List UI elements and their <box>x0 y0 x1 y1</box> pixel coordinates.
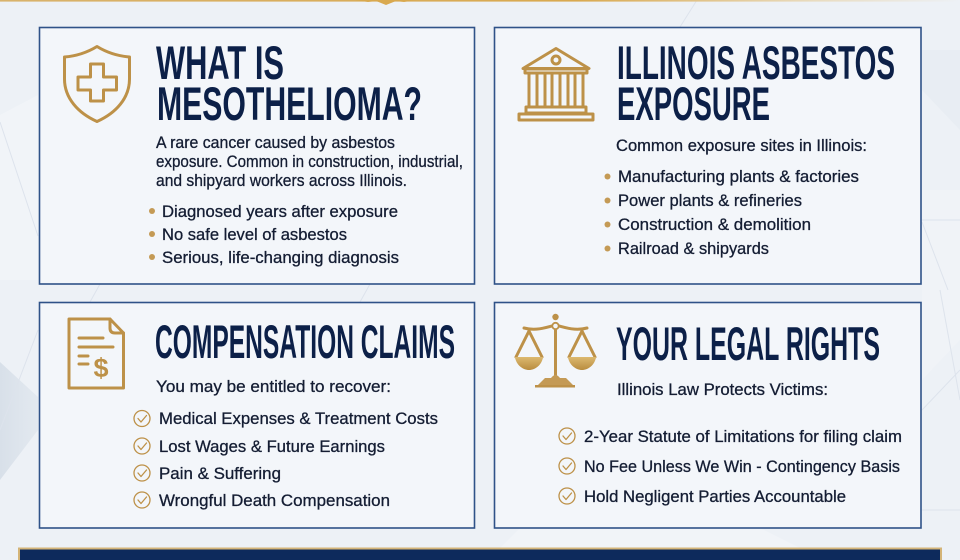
bullet list <box>604 167 859 258</box>
checklist <box>559 427 902 506</box>
intro text: You may be entitled to recover: <box>156 377 391 396</box>
panel: illinois asbestos exposure <box>494 28 921 284</box>
heading: WHAT IS <box>156 36 284 89</box>
bullet list: Railroad & shipyards <box>618 239 769 258</box>
bullet list: Power plants & refineries <box>618 191 802 210</box>
checklist: Wrongful Death Compensation <box>159 491 390 510</box>
heading: MESOTHELIOMA? <box>157 77 422 130</box>
panel: compensation claims <box>40 302 474 528</box>
checklist: Pain & Suffering <box>159 464 281 483</box>
heading <box>156 36 422 130</box>
icon: scales of justice <box>515 314 596 388</box>
checklist <box>134 409 438 510</box>
bottom navy banner <box>19 548 941 560</box>
heading: COMPENSATION CLAIMS <box>155 315 455 368</box>
heading: EXPOSURE <box>617 77 770 130</box>
description: exposure. Common in construction, industrial, <box>156 152 463 171</box>
intro text: Illinois Law Protects Victims: <box>617 380 828 399</box>
icon: courthouse <box>519 48 593 120</box>
icon: document with dollar sign <box>69 319 124 388</box>
checklist: Medical Expenses & Treatment Costs <box>159 409 438 428</box>
checklist: 2-Year Statute of Limitations for filing claim <box>584 427 902 446</box>
bullet list: No safe level of asbestos <box>162 225 347 244</box>
bullet list: Serious, life-changing diagnosis <box>162 248 399 267</box>
bullet list: Diagnosed years after exposure <box>162 202 398 221</box>
top gold rule with ornament <box>0 0 960 5</box>
bullet list <box>149 202 399 267</box>
bullet list: Manufacturing plants & factories <box>618 167 859 186</box>
checklist: Hold Negligent Parties Accountable <box>584 487 846 506</box>
description <box>156 133 463 190</box>
checklist: No Fee Unless We Win - Contingency Basis <box>584 457 900 476</box>
panel: your legal rights <box>494 302 921 528</box>
bullet list: Construction & demolition <box>618 215 811 234</box>
icon: shield with medical cross <box>64 46 130 122</box>
description: A rare cancer caused by asbestos <box>156 133 395 152</box>
description: and shipyard workers across Illinois. <box>156 171 407 190</box>
icon: document with dollar sign: $ <box>93 353 109 383</box>
intro text: Common exposure sites in Illinois: <box>616 136 867 155</box>
heading <box>617 36 895 130</box>
checklist: Lost Wages & Future Earnings <box>159 437 385 456</box>
panel: what is mesothelioma <box>40 28 474 284</box>
